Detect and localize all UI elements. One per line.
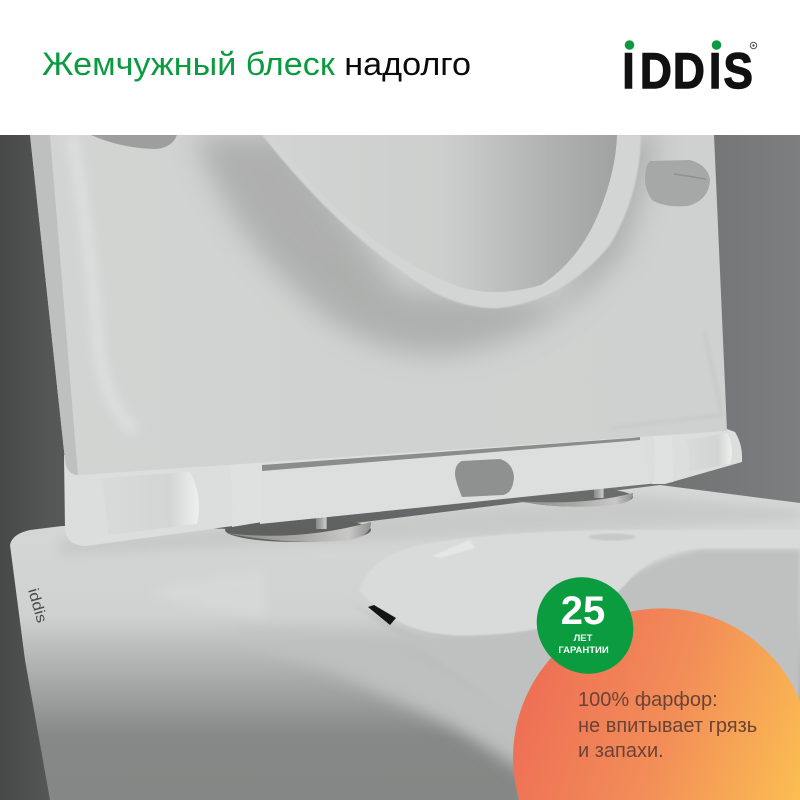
callout text: 100% фарфор: (578, 689, 718, 711)
badge: 25-year warranty: ГАРАНТИИ (558, 645, 609, 656)
photo: toilet seat lid (30, 135, 727, 476)
right connector (653, 436, 673, 484)
callout: orange circle (513, 608, 800, 800)
hinge vent (455, 459, 514, 497)
recess light strip (72, 135, 135, 432)
bowl reflection (150, 570, 265, 618)
left pocket (100, 472, 199, 535)
callout text: не впитывает грязь (578, 715, 757, 737)
left edge band (30, 135, 78, 476)
embossed iddis logo: iddis (24, 586, 50, 625)
seat shadow (195, 135, 660, 354)
right pocket (686, 433, 732, 472)
top left buffer (91, 135, 177, 149)
seat rim (262, 135, 641, 308)
badge: 25-year warranty: ЛЕТ (574, 633, 593, 644)
bowl front rim (364, 530, 654, 636)
badge: 25-year warranty: 25 (561, 589, 605, 633)
right buffer (645, 160, 710, 206)
left connector (229, 462, 262, 527)
bowl inner basin (345, 550, 800, 800)
rim highlight (434, 541, 474, 558)
header band (0, 0, 800, 135)
seat opening (453, 135, 617, 292)
callout text: и запахи. (578, 740, 664, 762)
bowl light band (319, 657, 518, 774)
hinge slot (262, 437, 640, 471)
photo: toilet bowl (10, 485, 800, 800)
title: Жемчужный блеск надолго (42, 46, 471, 82)
left hinge body (64, 450, 262, 546)
reflection oval (588, 534, 636, 540)
left disk (225, 516, 371, 542)
hinge bar (256, 434, 668, 524)
logo: IDDIS: IDDIS (622, 42, 753, 99)
photo: hinge assembly (64, 429, 742, 546)
bowl shadow under lid (60, 495, 800, 555)
right hinge body (640, 429, 742, 484)
right disk (515, 486, 633, 507)
photo: rear mounting disks (225, 486, 633, 542)
drain slit (368, 605, 396, 625)
badge: 25-year warranty (517, 557, 653, 694)
